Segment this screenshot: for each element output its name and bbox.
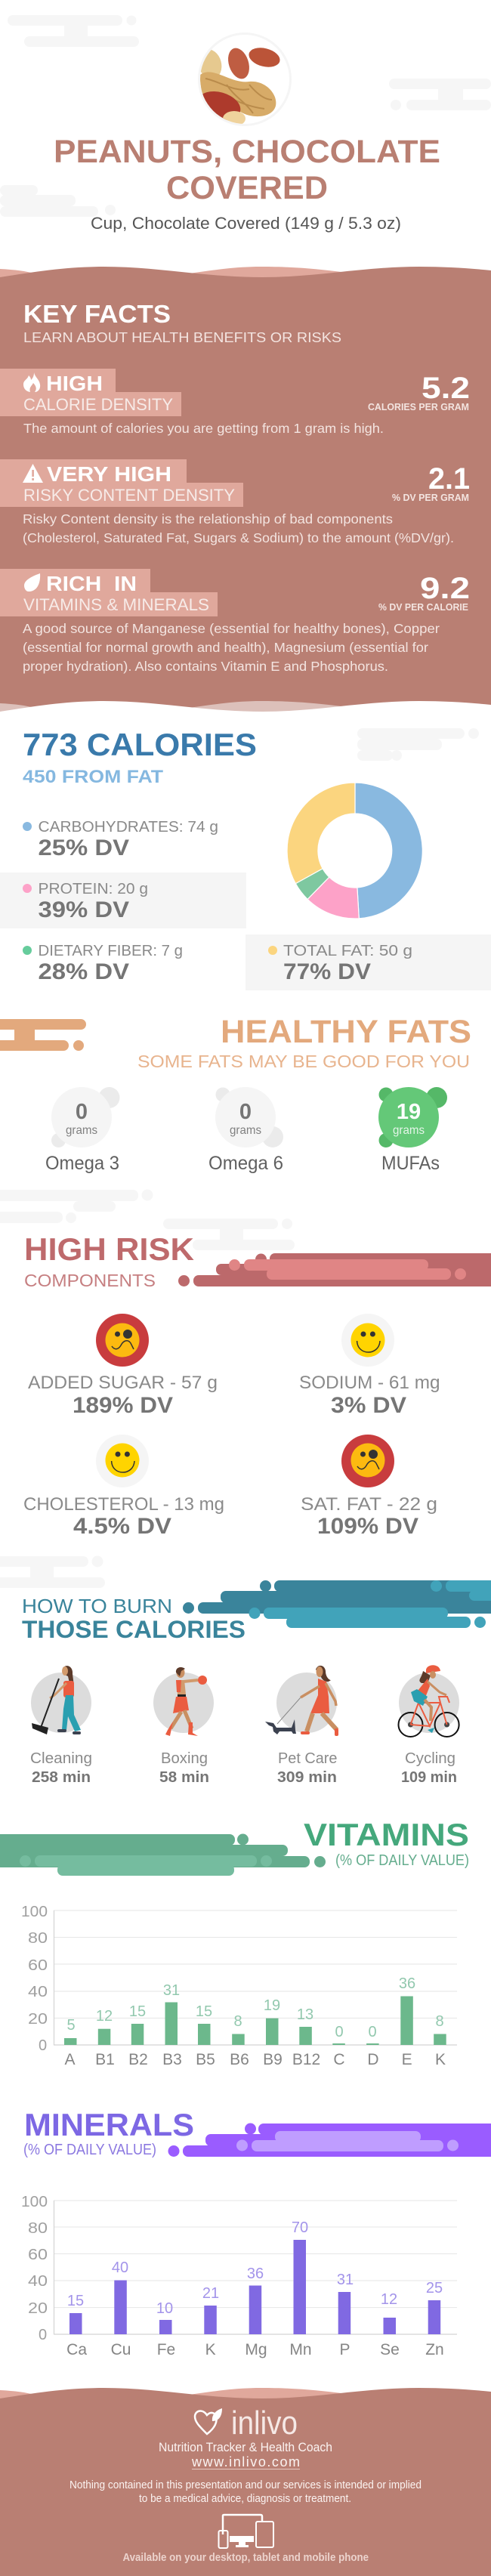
bar chart: minerals: K (205, 2341, 216, 2358)
title: COVERED (166, 170, 328, 206)
legend: dietary fiber (23, 943, 183, 984)
bar chart: vitamins: 15 (196, 2003, 212, 2020)
activity: cleaning: Cleaning (30, 1750, 92, 1767)
text: risky content description: Risky Content density is the relationship of bad components (23, 511, 393, 527)
legend: total fat: 77% DV (283, 959, 371, 984)
label box: very high risky content: VERY HIGH (47, 462, 171, 486)
metric: cholesterol: CHOLESTEROL - 13 mg (23, 1494, 224, 1515)
decorative bars: high risk (178, 1253, 491, 1286)
subtitle: serving size: Cup, Chocolate Covered (149 g / 5.3 oz) (91, 214, 401, 233)
bar chart: vitamins: B2 (128, 2051, 148, 2068)
bar chart: vitamins: 80 (28, 1930, 48, 1947)
subheading: some fats: SOME FATS MAY BE GOOD FOR YOU (137, 1052, 470, 1071)
label box: high calorie density: HIGH (46, 372, 103, 395)
bar chart: vitamins: 19 (264, 1997, 280, 2014)
stat: omega 3: grams (66, 1124, 97, 1137)
decorative bars: burn (183, 1580, 491, 1628)
bar chart: vitamins: 36 (399, 1975, 415, 1992)
label box: rich in vitamins and minerals (0, 569, 218, 616)
heading: healthy fats: HEALTHY FATS (221, 1014, 471, 1050)
legend: dietary fiber: 28% DV (38, 959, 129, 984)
activity: boxing (153, 1667, 214, 1786)
bar chart: minerals: 60 (28, 2247, 48, 2263)
icon: woman walking dog (265, 1666, 338, 1736)
decorative bars: healthy fats (0, 1019, 86, 1051)
disclaimer (69, 2479, 422, 2505)
bar chart: minerals: Ca (66, 2341, 87, 2358)
bar chart: vitamins: C (333, 2051, 345, 2068)
metric: sodium (299, 1373, 440, 1418)
bar chart: vitamins: B1 (95, 2051, 115, 2068)
heading: vitamins: VITAMINS (304, 1817, 469, 1852)
bar chart: vitamins: B9 (263, 2051, 283, 2068)
legend: protein (0, 873, 246, 928)
bar chart: minerals: Se (380, 2341, 400, 2358)
icon: happy face sodium (341, 1314, 394, 1367)
bar chart: vitamins: 0 (368, 2024, 377, 2040)
icon: cyclist (399, 1665, 459, 1737)
title: PEANUTS, CHOCOLATE (54, 134, 440, 170)
panel: footer (0, 2388, 491, 2576)
bar chart: vitamins: B3 (162, 2051, 182, 2068)
bar chart: minerals: Mg (245, 2341, 267, 2358)
bar chart: vitamins: B12 (292, 2051, 320, 2068)
decorative bars: vitamins (0, 1834, 326, 1876)
activity: cycling: 109 min (401, 1769, 457, 1786)
legend: total fat (246, 934, 491, 990)
metric: sodium: 3% DV (331, 1393, 406, 1418)
bar chart: vitamins: 8 (233, 2013, 242, 2030)
label box: rich in vitamins and minerals: VITAMINS & MINERALS (23, 595, 209, 614)
bar chart: vitamins: K (435, 2051, 446, 2068)
stat: MUFAs: grams (393, 1124, 425, 1137)
decorative clouds above high risk (0, 1189, 295, 1250)
activity: boxing: Boxing (161, 1750, 208, 1767)
bar chart: vitamins: 5 (66, 2017, 76, 2034)
decorative bars: minerals (168, 2123, 491, 2157)
background decoration clouds in header (0, 15, 491, 217)
metric: cholesterol: 4.5% DV (73, 1514, 171, 1539)
metric: cholesterol (23, 1494, 224, 1539)
icon: happy face cholesterol (96, 1435, 149, 1487)
legend: carbohydrates: CARBOHYDRATES: 74 g (38, 819, 218, 836)
legend: protein: 39% DV (38, 897, 129, 922)
metric: saturated fat: 109% DV (317, 1514, 418, 1539)
text: risky content description (23, 511, 454, 545)
stat: calories per gram: CALORIES PER GRAM (368, 402, 469, 412)
activity: cleaning: 258 min (32, 1769, 91, 1786)
heading: key facts: KEY FACTS (23, 300, 171, 328)
bar chart: vitamins: D (367, 2051, 379, 2068)
heading: minerals: MINERALS (24, 2107, 194, 2142)
bar chart: minerals: 25 (426, 2280, 443, 2296)
bar chart: minerals: 31 (337, 2272, 354, 2288)
stat: dv per calorie: % DV PER CALORIE (378, 602, 468, 613)
bar chart: vitamins: 0 (335, 2024, 344, 2040)
activity: pet care: Pet Care (278, 1750, 337, 1767)
stat: omega 3 (45, 1087, 119, 1174)
icon: flame (23, 372, 40, 392)
heading: those calories: THOSE CALORIES (22, 1616, 246, 1643)
heading: high risk: HIGH RISK (24, 1231, 194, 1267)
metric: added sugar: 189% DV (73, 1393, 173, 1418)
metric: sodium: SODIUM - 61 mg (299, 1373, 440, 1393)
subheading: from fat: 450 FROM FAT (23, 767, 163, 787)
bar chart: minerals: P (339, 2341, 350, 2358)
donut chart (287, 783, 422, 919)
bar chart: minerals: Mn (289, 2341, 312, 2358)
bar chart: vitamins: 100 (21, 1904, 48, 1920)
stat: omega 6: grams (230, 1124, 261, 1137)
metric: added sugar: ADDED SUGAR - 57 g (28, 1373, 218, 1393)
stat: calories per gram: 5.2 (422, 372, 470, 405)
bar chart: minerals: Zn (425, 2341, 444, 2358)
stat: omega 3: 0 (76, 1100, 88, 1124)
icon: sad face added sugar (96, 1314, 149, 1367)
metric: saturated fat (301, 1494, 437, 1539)
subheading: components: COMPONENTS (24, 1271, 156, 1290)
metric: saturated fat: SAT. FAT - 22 g (301, 1494, 437, 1515)
text: rich in description (23, 621, 440, 674)
legend: carbohydrates: 25% DV (38, 836, 129, 860)
logo wordmark: inlivo (231, 2405, 298, 2442)
activity: pet care: 309 min (277, 1769, 337, 1786)
bar chart: minerals: 70 (292, 2219, 308, 2236)
bar chart: vitamins: 31 (163, 1982, 180, 1999)
bar chart: minerals: 40 (28, 2273, 48, 2290)
bar chart: minerals: 20 (28, 2300, 48, 2317)
bar chart: vitamins: 12 (96, 2008, 113, 2025)
disclaimer: Nothing contained in this presentation and our services is intended or implied (69, 2479, 422, 2491)
bar chart: vitamins: 8 (435, 2013, 444, 2030)
bar chart: vitamins: 20 (28, 2011, 48, 2028)
legend: carbohydrates (23, 819, 218, 860)
activity: pet care (265, 1666, 338, 1786)
icon: boxer (165, 1667, 207, 1736)
activity: boxing: 58 min (159, 1769, 209, 1786)
bar chart: minerals: 0 (39, 2327, 47, 2343)
heading: how to burn: HOW TO BURN (22, 1595, 172, 1617)
bar chart: minerals: 10 (156, 2300, 173, 2317)
stat: dv per gram: % DV PER GRAM (392, 493, 469, 503)
availability note: Available on your desktop, tablet and mobile phone (122, 2551, 369, 2564)
bar chart: minerals: 15 (67, 2293, 84, 2309)
text: calorie density description: The amount of calories you are getting from 1 gram is high. (23, 421, 384, 436)
bar chart: minerals: Cu (111, 2341, 131, 2358)
decorative cloud above burn section (0, 1556, 105, 1588)
icon: leaf (24, 573, 40, 591)
subheading: LEARN ABOUT HEALTH BENEFITS OR RISKS (23, 329, 341, 345)
legend: total fat: TOTAL FAT: 50 g (283, 943, 412, 959)
stat: omega 6: Omega 6 (208, 1153, 283, 1174)
stat: dv per gram: 2.1 (428, 462, 470, 496)
bar chart: vitamins: 60 (28, 1957, 48, 1974)
icon: peanuts photo in circle (194, 32, 292, 126)
icon: warning triangle (23, 464, 43, 483)
bar chart: vitamins: 13 (297, 2006, 313, 2023)
bar chart: vitamins: A (64, 2051, 76, 2068)
tagline: Nutrition Tracker & Health Coach (159, 2440, 332, 2454)
legend: protein: PROTEIN: 20 g (38, 881, 148, 897)
disclaimer: to be a medical advice, diagnosis or treatment. (139, 2492, 351, 2505)
bar chart: vitamins: B5 (196, 2051, 215, 2068)
stat: MUFAs: 19 (397, 1100, 421, 1124)
label box: rich in vitamins and minerals: RICH IN (46, 572, 137, 595)
text: rich in description: proper hydration). Also contains Vitamin E and Phosphorus. (23, 659, 388, 674)
stat: dv per gram (392, 462, 470, 503)
bar chart: minerals: Fe (157, 2341, 175, 2358)
bar chart: minerals: 40 (112, 2259, 128, 2276)
icon: desktop tablet phone (219, 2515, 273, 2548)
bar chart: minerals: 12 (381, 2291, 397, 2308)
title (54, 134, 440, 206)
bar chart: minerals: 100 (21, 2194, 48, 2210)
activity: cycling: Cycling (405, 1750, 455, 1767)
bar chart: vitamins: E (402, 2051, 412, 2068)
label box: high calorie density: CALORIE DENSITY (23, 395, 173, 414)
stat: calories per gram (368, 372, 470, 412)
bar chart: minerals: 21 (202, 2285, 219, 2302)
bar chart: vitamins: 40 (28, 1984, 48, 2000)
heading: calories: 773 CALORIES (23, 727, 257, 762)
label box: very high risky content: RISKY CONTENT DENSITY (23, 486, 235, 505)
metric: added sugar (28, 1373, 218, 1418)
stat: dv per calorie (378, 572, 470, 613)
legend: dietary fiber: DIETARY FIBER: 7 g (38, 943, 183, 959)
bar chart: minerals: 80 (28, 2220, 48, 2237)
stat: MUFAs: MUFAs (381, 1153, 440, 1174)
bar chart: vitamins: B6 (230, 2051, 249, 2068)
subheading: minerals daily value: (% OF DAILY VALUE) (23, 2142, 156, 2158)
stat: dv per calorie: 9.2 (420, 572, 470, 605)
website link: www.inlivo.com (191, 2454, 300, 2469)
decorative cloud behind donut (357, 728, 479, 761)
bar chart: vitamins: 15 (129, 2003, 146, 2020)
stat: omega 6 (208, 1087, 283, 1174)
text: risky content description: (Cholesterol, Saturated Fat, Sugars & Sodium) to the amount (%DV/gr). (23, 530, 454, 545)
icon: sad face saturated fat (341, 1435, 394, 1487)
bar chart: minerals (21, 2194, 457, 2358)
icon: inlivo heart logo (195, 2408, 222, 2434)
bar chart: vitamins (21, 1904, 457, 2068)
bar chart: vitamins: 0 (39, 2037, 47, 2054)
label box: very high risky content (0, 459, 243, 507)
stat: omega 6: 0 (239, 1100, 252, 1124)
subheading: vitamins daily value: (% OF DAILY VALUE) (335, 1852, 469, 1869)
icon: person sweeping (32, 1666, 81, 1734)
stat: omega 3: Omega 3 (45, 1153, 119, 1174)
activity: cleaning (30, 1666, 92, 1786)
bar chart: minerals: 36 (247, 2266, 264, 2282)
activity: cycling (399, 1665, 459, 1786)
text: rich in description: A good source of Manganese (essential for healthy bones), Copper (23, 621, 440, 636)
text: rich in description: (essential for normal growth and health), Magnesium (essential for (23, 640, 428, 655)
panel: key facts (0, 267, 491, 718)
stat: MUFAs (378, 1087, 447, 1174)
label box: high calorie density (0, 369, 181, 416)
